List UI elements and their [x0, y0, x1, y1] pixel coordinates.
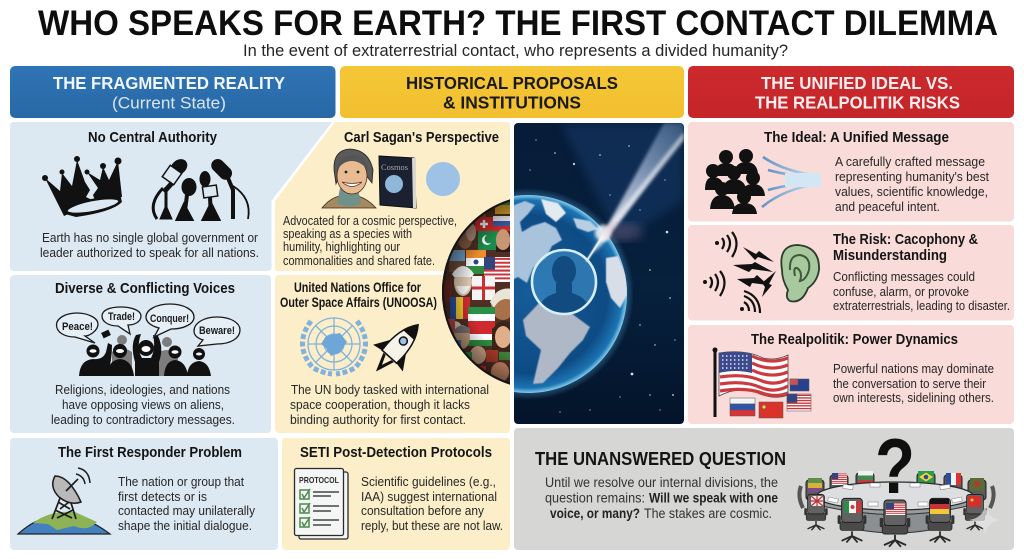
column header: unified ideal vs realpolitik: THE REALPOLITIK RISKS [755, 92, 960, 112]
south america [523, 302, 590, 384]
icon: satellite dish on earth [18, 468, 110, 534]
icon: rocket [361, 311, 433, 385]
icon: crowd merging into one stream [705, 149, 821, 214]
heading: unanswered question: THE UNANSWERED QUESTION [535, 448, 786, 469]
text: realpolitik: the conversation to serve their [833, 376, 987, 391]
text: the ideal: values, scientific knowledge, [835, 184, 988, 199]
text: no central authority [40, 230, 259, 260]
text: diverse voices [51, 382, 235, 427]
panel: unoosa [275, 275, 510, 433]
text: unoosa: space cooperation, though it lacks [290, 397, 470, 412]
text: the risk [833, 269, 1010, 313]
icon: dominant american flag with small flags [712, 348, 811, 418]
column header: historical proposals [340, 66, 684, 118]
text: first responder: first detects or is [118, 489, 207, 504]
panel: the realpolitik, power dynamics [688, 325, 1014, 424]
heading: unoosa: United Nations Office for [294, 280, 422, 295]
column header: the fragmented reality: THE FRAGMENTED REALITY [53, 73, 285, 93]
text: carl sagan: Advocated for a cosmic perspective, [283, 213, 457, 228]
text: realpolitik [833, 361, 994, 405]
north america [512, 199, 598, 283]
text: first responder: shape the initial dialogue. [118, 518, 252, 533]
text: unoosa [290, 382, 489, 427]
column header: the fragmented reality [10, 66, 336, 118]
text: the risk: Conflicting messages could [833, 269, 975, 284]
text: the ideal [835, 154, 989, 214]
icon: person silhouette in ring [532, 250, 596, 320]
icon: broken crowns [42, 156, 122, 217]
illustration: arguing crowd with speech bubbles: Trade! [108, 311, 135, 323]
illustration: cosmos book: Cosmos [381, 162, 408, 172]
heading: the ideal: The Ideal: A Unified Message [764, 129, 949, 146]
illustration: arguing crowd with speech bubbles: Beware! [199, 325, 235, 337]
panel: the first responder problem [10, 438, 278, 550]
column header: unified ideal vs realpolitik [688, 66, 1014, 118]
watermark sparkle [969, 505, 1001, 535]
title: WHO SPEAKS FOR EARTH? THE FIRST CONTACT DILEMMA [38, 4, 998, 43]
text: seti: Scientific guidelines (e.g., [361, 474, 496, 489]
central image: earth with a single voice beam [514, 123, 684, 424]
text: unanswered question: Will we speak with one [649, 490, 778, 506]
illustration: arguing crowd with speech bubbles: Conquer! [150, 313, 189, 325]
front row chairs [804, 494, 987, 547]
icon: protocol document [294, 468, 348, 539]
column header: the fragmented reality: (Current State) [112, 94, 226, 112]
heading: no central authority: No Central Authority [88, 129, 218, 146]
text: seti [361, 474, 503, 533]
illustration: arguing crowd with speech bubbles: Peace! [62, 321, 93, 333]
subtitle: In the event of extraterrestrial contact, who represents a divided humanity? [243, 41, 788, 60]
text: diverse voices: leading to contradictory messages. [51, 412, 235, 427]
column header: historical proposals: & INSTITUTIONS [443, 92, 581, 112]
table [817, 482, 973, 533]
text: carl sagan: humility, highlighting our [283, 239, 401, 254]
panel: no central authority [10, 122, 332, 271]
heading: unoosa: Outer Space Affairs (UNOOSA) [280, 295, 437, 310]
heading: the risk [833, 231, 978, 264]
illustration: round table with flagged chairs [799, 422, 994, 547]
panel: the ideal, a unified message [688, 122, 1014, 222]
column header: historical proposals: HISTORICAL PROPOSALS [406, 73, 618, 93]
text: first responder: The nation or group that [118, 474, 244, 489]
panel: carl sagan's perspective [275, 122, 510, 271]
panel: seti post-detection protocols [282, 438, 510, 550]
panel: the risk, cacophony and misunderstanding [688, 225, 1014, 320]
beam of light [586, 123, 684, 262]
text: seti: reply, but these are not law. [361, 518, 503, 533]
illustration: cosmos book [379, 156, 416, 208]
text: the ideal: A carefully crafted message [835, 154, 985, 169]
text: seti: IAA) suggest international [361, 489, 497, 504]
heading: carl sagan: Carl Sagan's Perspective [344, 129, 499, 146]
heading: unoosa [280, 280, 437, 310]
text: unanswered question: The stakes are cosmic. [644, 506, 772, 521]
illustration: globe of flags and faces [442, 199, 510, 385]
heading: first responder: The First Responder Problem [58, 444, 242, 461]
heading: the risk: The Risk: Cacophony & [833, 231, 978, 248]
panel: diverse and conflicting voices [10, 275, 271, 433]
text: first responder [118, 474, 255, 533]
question mark: ? [875, 422, 915, 510]
column header: unified ideal vs realpolitik: THE UNIFIED IDEAL VS. [761, 73, 953, 93]
illustration: arguing crowd with speech bubbles [56, 304, 240, 376]
heading: diverse voices: Diverse & Conflicting Voices [55, 280, 235, 297]
text: unoosa: The UN body tasked with international [291, 382, 489, 397]
text: unoosa: binding authority for first contact. [290, 412, 466, 427]
icon: protocol document: PROTOCOL [299, 475, 339, 485]
icon: pale blue dot [426, 162, 460, 196]
text: the ideal: and peaceful intent. [835, 199, 940, 214]
back row chairs [799, 471, 994, 508]
text: unanswered question: question remains: [545, 490, 645, 506]
icon: clashing signals and ear [703, 232, 819, 313]
text: realpolitik: Powerful nations may dominate [833, 361, 994, 376]
heading: seti: SETI Post-Detection Protocols [300, 444, 492, 461]
large US flag [719, 352, 788, 397]
stars [529, 139, 676, 413]
text: first responder: contacted may unilaterally [118, 503, 255, 518]
text: diverse voices: Religions, ideologies, and nations [55, 382, 230, 397]
text: carl sagan [283, 213, 457, 268]
text: the ideal: representing humanity's best [835, 169, 989, 184]
text: unanswered question [545, 475, 778, 521]
icon: united nations emblem [302, 318, 366, 374]
text: carl sagan: commonalities and shared fate. [283, 253, 435, 268]
panel: the unanswered question [514, 422, 1014, 550]
text: seti: consultation before any [361, 503, 484, 518]
text: the risk: confuse, alarm, or provoke [833, 284, 969, 299]
heading: the risk: Misunderstanding [833, 247, 947, 264]
text: no central authority: leader authorized to speak for all nations. [40, 245, 259, 260]
icon: microphones [153, 156, 249, 219]
small flags [730, 379, 811, 418]
text: realpolitik: own interests, sidelining others. [833, 390, 994, 405]
text: carl sagan: speaking as a species with [283, 226, 412, 241]
text: no central authority: Earth has no single global government or [42, 230, 259, 245]
illustration: carl sagan portrait [322, 149, 376, 208]
text: diverse voices: have opposing views on aliens, [62, 397, 224, 412]
text: unanswered question: Until we resolve our internal divisions, the [545, 475, 778, 490]
text: unanswered question: voice, or many? [550, 506, 640, 521]
heading: realpolitik: The Realpolitik: Power Dynamics [751, 331, 958, 348]
africa [606, 256, 628, 308]
